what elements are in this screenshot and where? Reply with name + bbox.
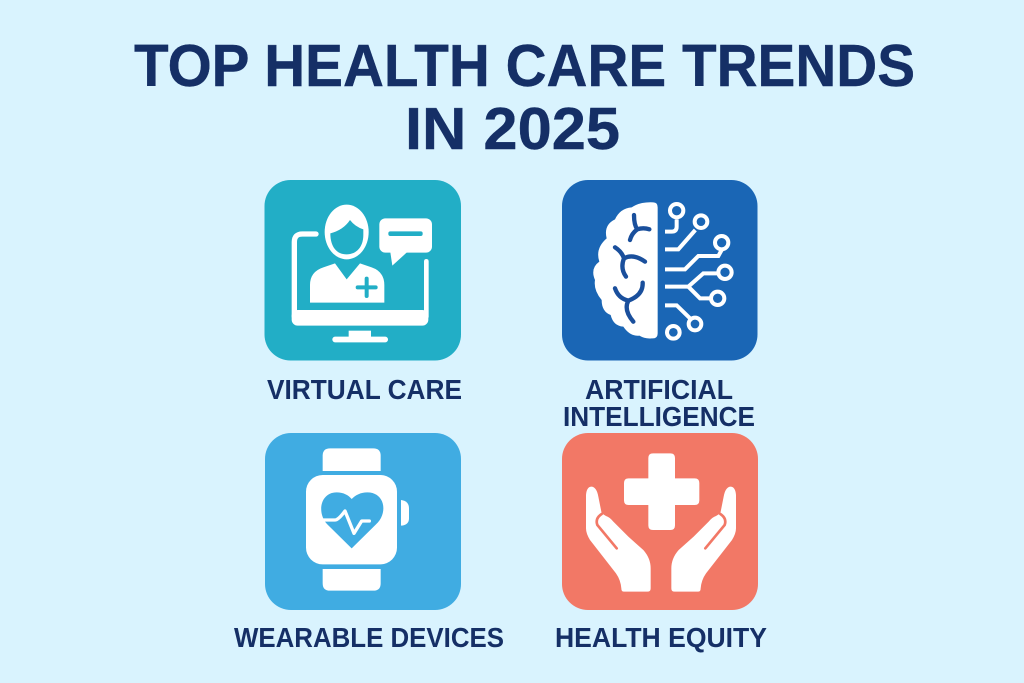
panel: artificial intelligence	[562, 180, 758, 360]
title	[134, 33, 915, 162]
label: health equity: HEALTH EQUITY	[555, 622, 767, 653]
icon: brain and circuits	[593, 202, 732, 339]
icon: smartwatch with heart	[306, 448, 409, 591]
icon: doctor on monitor	[292, 205, 432, 342]
label: artificial intelligence: ARTIFICIAL	[585, 374, 733, 405]
title: TOP HEALTH CARE TRENDS	[134, 33, 915, 99]
panel: virtual care	[264, 180, 461, 360]
panel: wearable devices	[265, 433, 461, 610]
label: virtual care: VIRTUAL CARE	[267, 374, 462, 405]
icon: hands holding cross	[586, 453, 736, 592]
panel: health equity	[562, 433, 758, 610]
label: wearable devices: WEARABLE DEVICES	[234, 622, 504, 653]
title: IN 2025	[405, 96, 620, 162]
label: artificial intelligence	[563, 374, 755, 432]
label: artificial intelligence: INTELLIGENCE	[563, 401, 755, 432]
